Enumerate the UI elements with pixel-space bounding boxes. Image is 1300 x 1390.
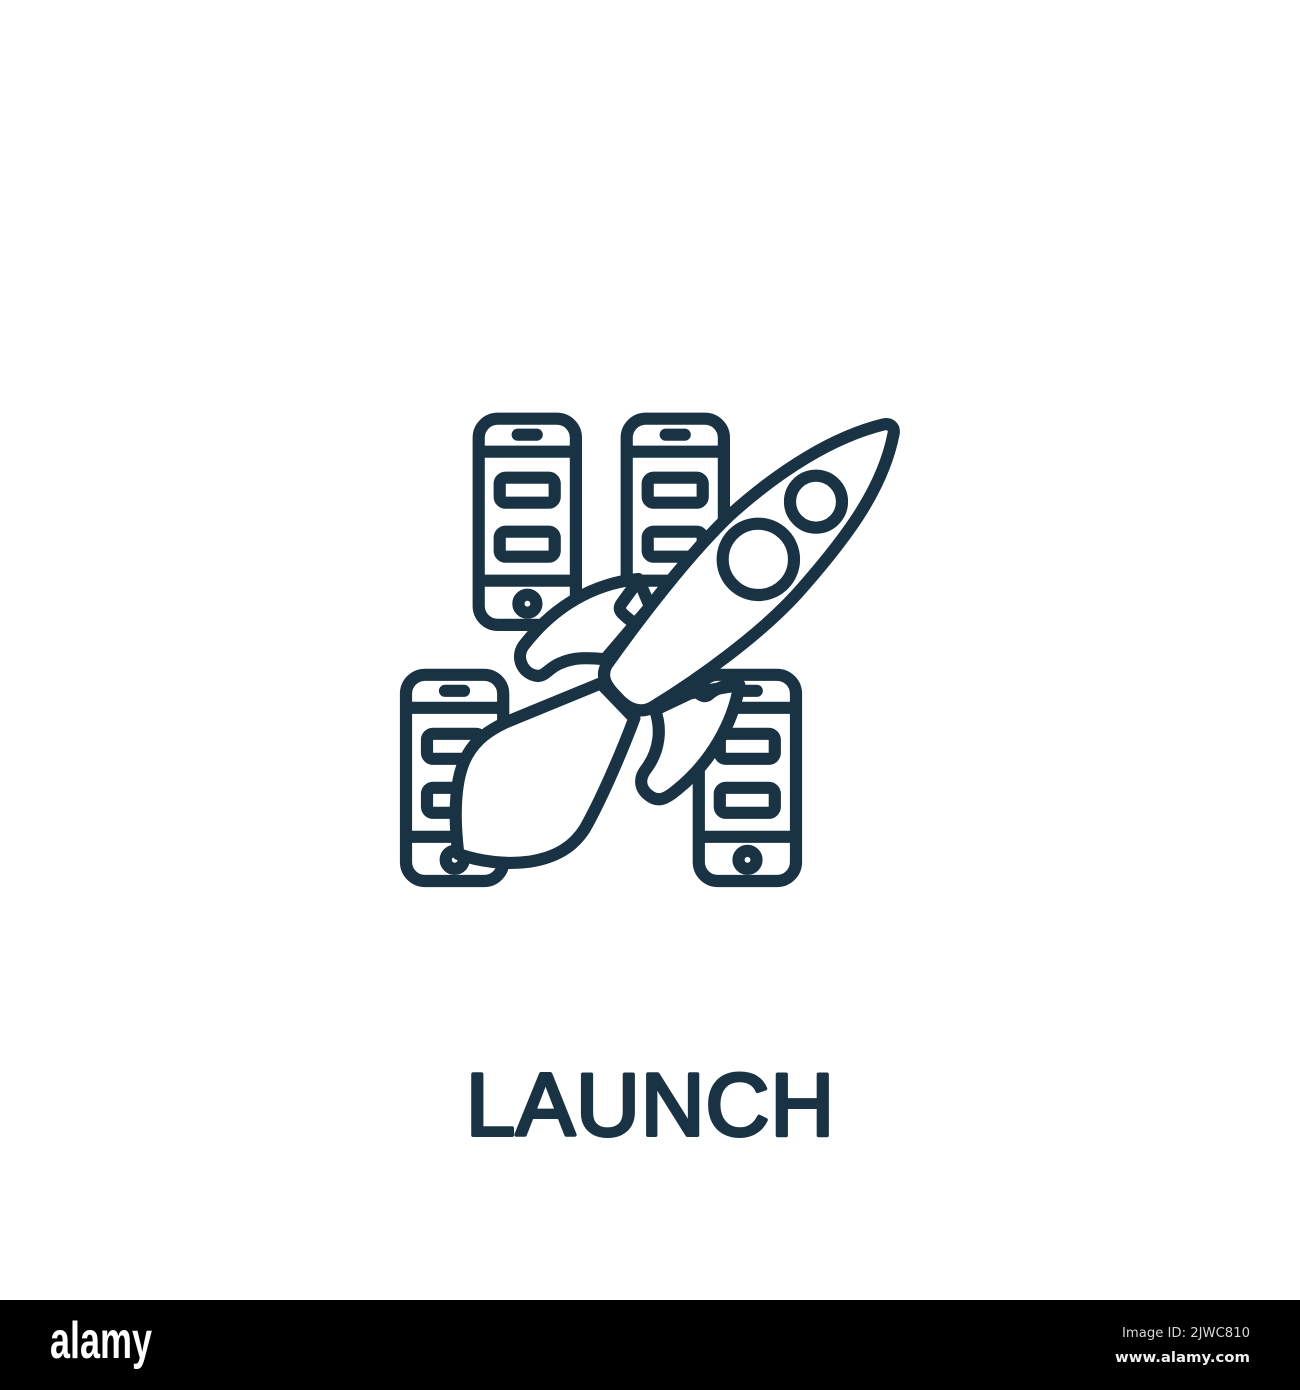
rocket flame [456,683,634,863]
rocket fin notch left [620,585,635,624]
rocket window large [723,524,794,595]
rocket right fin [641,685,739,799]
icon: phone bottom right [699,675,796,881]
rocket window small [790,476,842,528]
icon: phone bottom left [406,675,503,881]
icon: phones and rocket launch [406,419,894,881]
footer url: www.alamy.com [1115,1350,1250,1366]
footer image id: Image ID: 2JWC810 [1122,1325,1250,1341]
rocket body [604,424,894,710]
icon: rocket [456,424,894,863]
icon: phone top right [627,419,724,625]
title: LAUNCH [466,1055,834,1154]
icon: phone top left [479,419,576,625]
rocket fin notch right [695,683,737,696]
footer bar [0,1300,1300,1390]
footer logo: alamy [50,1312,152,1370]
rocket left fin [520,579,650,676]
